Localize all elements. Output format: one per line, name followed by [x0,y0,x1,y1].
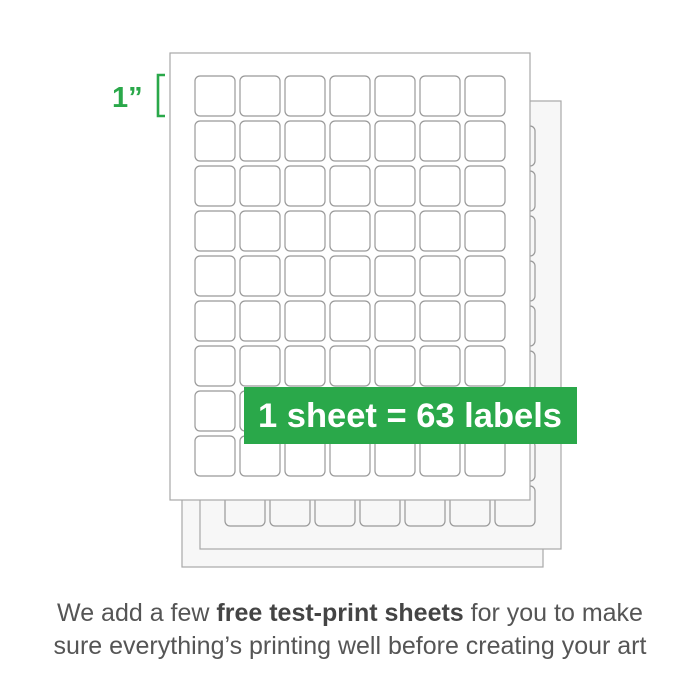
callout banner [244,387,577,444]
caption: We add a few free test-print sheets for you to make [57,599,643,627]
caption [54,599,646,660]
callout banner: 1 sheet = 63 labels [258,397,562,435]
back sheet [182,120,543,567]
caption: sure everything’s printing well before creating your art [54,632,646,660]
middle sheet [200,101,561,549]
size bracket [112,75,165,116]
front sheet [170,53,530,500]
size bracket: 1” [112,82,143,114]
